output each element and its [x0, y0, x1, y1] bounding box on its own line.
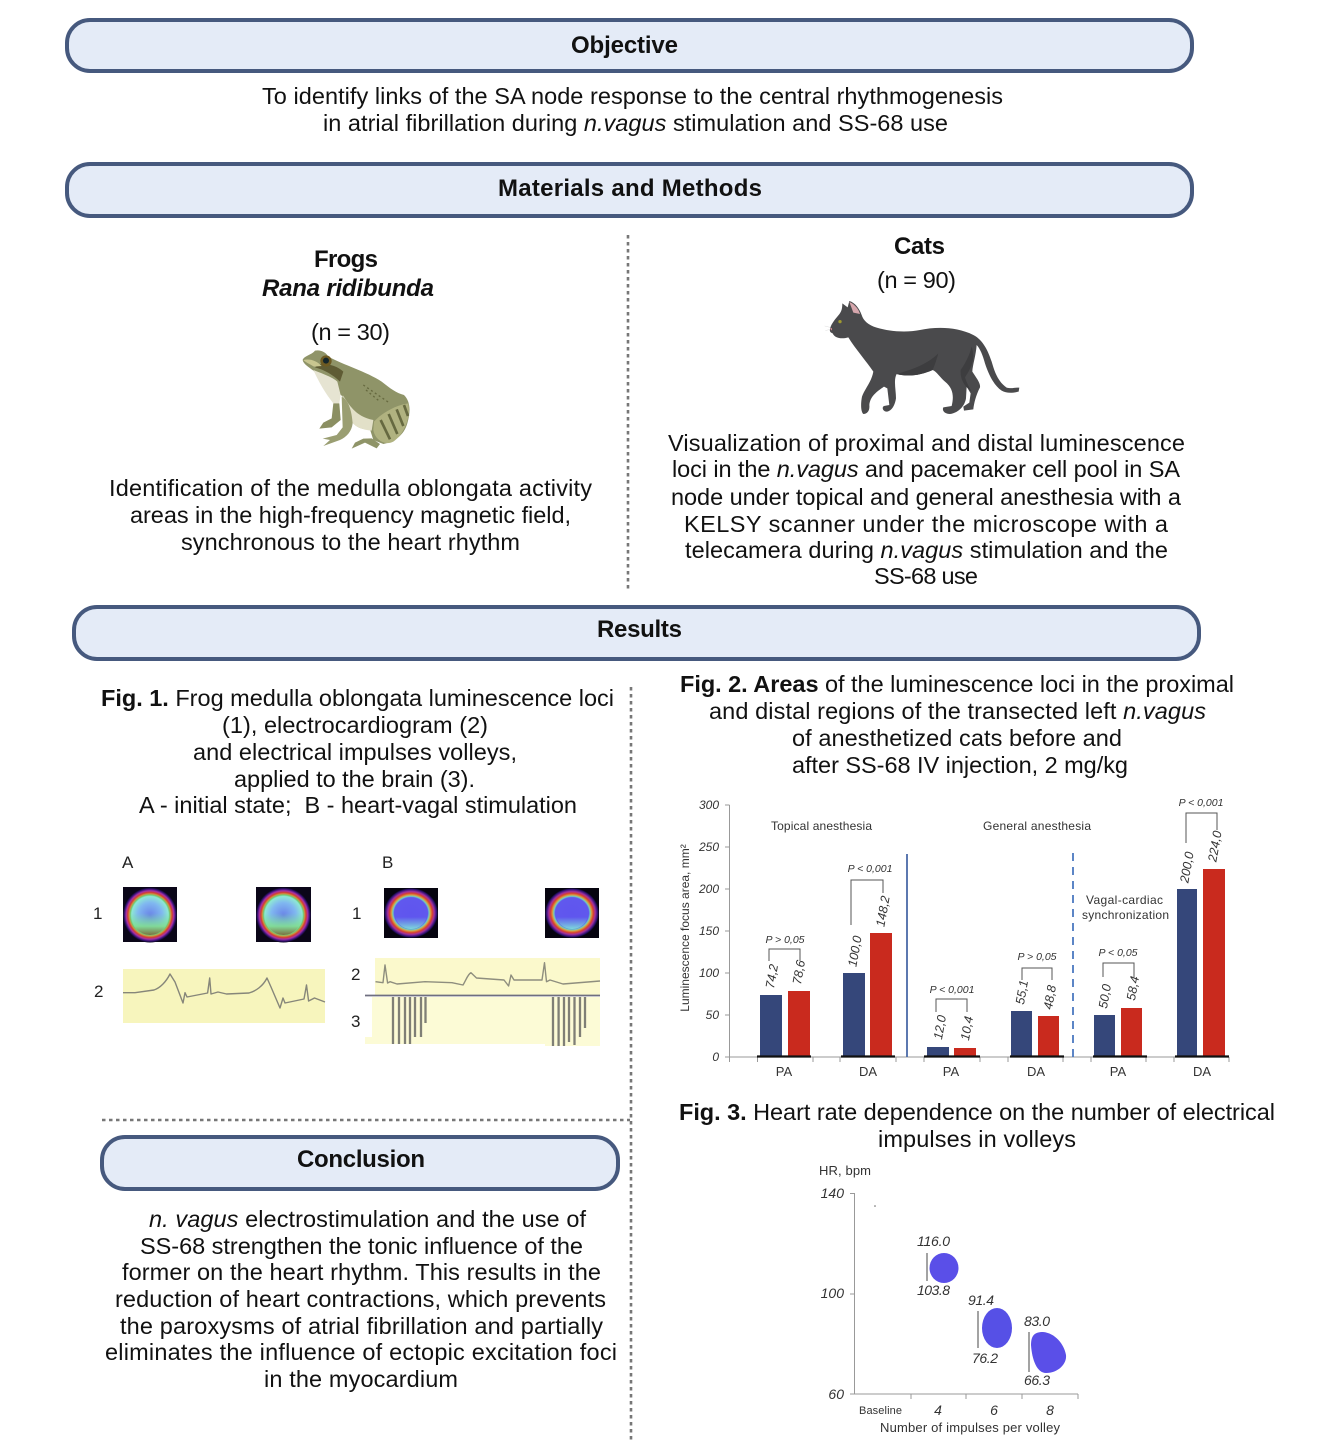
- frogs heading: Frogs: [314, 246, 378, 273]
- header: Objective: Objective: [571, 32, 678, 59]
- conclusion text: reduction of heart contractions, which prevents: [115, 1286, 606, 1312]
- range lines and values: 103.8: [917, 1282, 950, 1298]
- significance brackets: P > 0,05: [765, 934, 805, 946]
- conclusion text: former on the heart rhythm. This results in the: [122, 1259, 601, 1285]
- bar values: 148,2: [873, 895, 893, 928]
- y axis: 0: [712, 1050, 719, 1064]
- frogs description: Identification of the medulla oblongata activity: [109, 475, 592, 501]
- axes: HR, bpm: [819, 1163, 871, 1178]
- x axis: PA: [1110, 1064, 1127, 1079]
- x axis: PA: [776, 1064, 793, 1079]
- divider: results vertical: [630, 687, 632, 1440]
- divider: conclusion horizontal: [102, 1119, 630, 1121]
- bar values: 224,0: [1205, 830, 1225, 864]
- luminescence image A left: [123, 887, 177, 942]
- range lines and values: 116.0: [917, 1233, 950, 1249]
- y axis: Luminescence focus area, mm²: [678, 844, 692, 1012]
- figure 1 caption: A - initial state; B - heart-vagal stimulation: [139, 792, 577, 818]
- figure 2 caption: after SS-68 IV injection, 2 mg/kg: [792, 752, 1128, 778]
- cats heading: [877, 233, 956, 293]
- bar values: 12,0: [931, 1014, 949, 1041]
- figure 1 caption: and electrical impulses volleys,: [193, 739, 517, 765]
- group labels: Vagal-cardiac: [1086, 893, 1163, 907]
- group labels: General anesthesia: [983, 819, 1091, 833]
- header: Materials and Methods: Materials and Methods: [498, 175, 762, 202]
- frogs heading: (n = 30): [311, 319, 390, 345]
- panel A recordings: [93, 853, 325, 1023]
- conclusion text: in the myocardium: [264, 1366, 458, 1392]
- group labels: [771, 819, 1169, 922]
- conclusion text: SS-68 strengthen the tonic influence of the: [140, 1233, 583, 1259]
- axes: 140: [821, 1185, 844, 1201]
- y axis: [678, 798, 730, 1064]
- bars: [757, 869, 1229, 1057]
- cats description: telecamera during n.vagus stimulation and the: [685, 537, 1168, 563]
- ECG trace B: [375, 958, 600, 995]
- objective text: in atrial fibrillation during n.vagus stimulation and SS-68 use: [323, 110, 948, 136]
- bar values: 74,2: [763, 963, 781, 990]
- figure 2 caption: [680, 671, 1234, 778]
- bar values: 78,6: [790, 959, 808, 986]
- significance brackets: P < 0,05: [1098, 947, 1138, 959]
- header: Objective: [67, 20, 1192, 71]
- panel A recordings: A: [122, 853, 134, 872]
- axes: Number of impulses per volley: [880, 1420, 1060, 1435]
- significance brackets: P < 0,001: [930, 984, 974, 996]
- cats heading: Cats: [894, 233, 945, 260]
- y axis: 200: [698, 882, 719, 896]
- luminescence image A right: [256, 887, 311, 942]
- bar values: 200,0: [1177, 851, 1197, 885]
- panel: frogs: [109, 246, 592, 555]
- frogs description: areas in the high-frequency magnetic field,: [130, 502, 571, 528]
- panel A recordings: 2: [94, 982, 103, 1001]
- figure 2 caption: and distal regions of the transected left n.vagus: [709, 698, 1206, 724]
- figure 1: recordings: [93, 853, 600, 1046]
- frogs description: synchronous to the heart rhythm: [181, 529, 520, 555]
- x axis: PA: [943, 1064, 960, 1079]
- bar values: 48,8: [1041, 984, 1059, 1011]
- axes: 6: [990, 1402, 998, 1418]
- ECG trace A: [123, 969, 325, 1023]
- figure 1 caption: applied to the brain (3).: [234, 766, 475, 792]
- cats description: Visualization of proximal and distal luminescence: [668, 430, 1185, 456]
- group separators: [907, 853, 1073, 1057]
- range lines and values: [917, 1233, 1050, 1388]
- impulse volleys: [365, 997, 600, 1046]
- range lines and values: 66.3: [1024, 1372, 1050, 1388]
- axes: 4: [934, 1402, 942, 1418]
- cats description: node under topical and general anesthesia with a: [671, 484, 1182, 510]
- figure 3 caption: impulses in volleys: [878, 1126, 1076, 1152]
- cats heading: (n = 90): [877, 267, 956, 293]
- group labels: Topical anesthesia: [771, 819, 872, 833]
- figure 3 caption: [679, 1099, 1275, 1152]
- figure 3 caption: Fig. 3. Heart rate dependence on the number of electrical: [679, 1099, 1275, 1125]
- panel A recordings: 1: [93, 904, 102, 923]
- range lines and values: 76.2: [972, 1350, 998, 1366]
- bar values: 55,1: [1013, 979, 1031, 1006]
- x axis: DA: [859, 1064, 877, 1079]
- conclusion text: the paroxysms of atrial fibrillation and partially: [120, 1313, 603, 1339]
- y axis: 300: [699, 798, 719, 812]
- bar values: 58,4: [1124, 975, 1142, 1002]
- frogs heading: Rana ridibunda: [262, 275, 434, 302]
- conclusion text: n. vagus electrostimulation and the use of: [149, 1206, 586, 1232]
- header: Materials and Methods: [67, 164, 1192, 216]
- conclusion text: [105, 1206, 617, 1392]
- bar values: [763, 830, 1225, 1042]
- bar values: 100,0: [845, 935, 865, 968]
- bar chart: luminescence focus area: [678, 797, 1229, 1079]
- header: Results: [74, 607, 1199, 659]
- frogs heading: [262, 246, 434, 345]
- y axis: 100: [699, 966, 719, 980]
- x axis: DA: [1027, 1064, 1045, 1079]
- bar values: 50,0: [1096, 983, 1114, 1010]
- conclusion text: eliminates the influence of ectopic excitation foci: [105, 1339, 617, 1365]
- y axis: 150: [699, 924, 719, 938]
- significance brackets: [765, 797, 1223, 1012]
- x axis: DA: [1193, 1064, 1211, 1079]
- header: Conclusion: [102, 1137, 618, 1189]
- axes: 8: [1046, 1402, 1054, 1418]
- group labels: synchronization: [1082, 908, 1169, 922]
- luminescence image B left: [384, 888, 438, 938]
- stimulation line: [365, 994, 600, 996]
- cats description: KELSY scanner under the microscope with a: [684, 511, 1169, 537]
- panel B recordings: 2: [351, 965, 360, 984]
- significance brackets: P < 0,001: [1179, 797, 1223, 809]
- range lines and values: 91.4: [968, 1292, 994, 1308]
- icon: cat: [825, 301, 1019, 414]
- significance brackets: P < 0,001: [848, 863, 892, 875]
- figure 1 caption: Fig. 1. Frog medulla oblongata luminescence loci: [101, 685, 614, 711]
- significance brackets: P > 0,05: [1017, 951, 1057, 963]
- cats description: SS-68 use: [874, 563, 978, 589]
- header: Results: Results: [597, 616, 682, 643]
- panel B recordings: 1: [352, 904, 361, 923]
- cats description: [668, 430, 1185, 589]
- panel B recordings: [351, 853, 600, 1046]
- header: Conclusion: Conclusion: [297, 1146, 425, 1173]
- figure 1 caption: [101, 685, 614, 818]
- objective text: To identify links of the SA node response to the central rhythmogenesis: [262, 83, 1003, 109]
- bar values: 10,4: [958, 1015, 976, 1042]
- axes: Baseline: [859, 1405, 902, 1417]
- range lines and values: 83.0: [1024, 1313, 1050, 1329]
- chart: heart rate vs impulses: [819, 1163, 1078, 1435]
- panel B recordings: B: [382, 853, 393, 872]
- divider: methods: [627, 235, 629, 592]
- axes: 100: [821, 1285, 844, 1301]
- x axis: [730, 1057, 1229, 1079]
- data blobs: [930, 1253, 1066, 1373]
- figure 2 caption: of anesthetized cats before and: [792, 725, 1122, 751]
- panel: cats: [668, 233, 1185, 589]
- frogs description: [109, 475, 592, 555]
- axes: 60: [828, 1386, 844, 1402]
- panel B recordings: 3: [351, 1012, 360, 1031]
- luminescence image B right: [545, 888, 599, 938]
- figure 2 caption: Fig. 2. Areas of the luminescence loci in the proximal: [680, 671, 1234, 697]
- axes: [819, 1163, 1078, 1435]
- icon: frog: [303, 350, 410, 449]
- figure 1 caption: (1), electrocardiogram (2): [222, 712, 488, 738]
- y axis: 50: [706, 1008, 719, 1022]
- objective text: [262, 83, 1003, 136]
- y axis: 250: [698, 840, 719, 854]
- cats description: loci in the n.vagus and pacemaker cell pool in SA: [672, 456, 1180, 482]
